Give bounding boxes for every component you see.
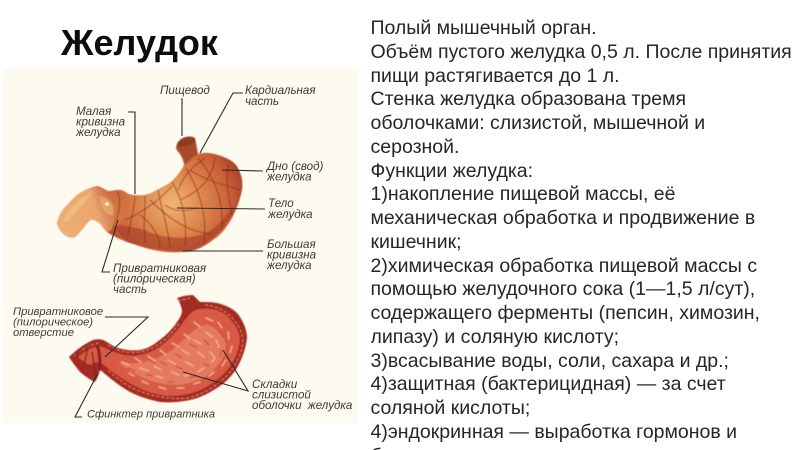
label: mucosal folds <box>252 378 353 412</box>
label: greater curvature: желудка <box>266 259 312 272</box>
label: body <box>267 197 313 221</box>
image background panel <box>3 68 358 423</box>
label: cardia <box>245 84 316 108</box>
text block: stomach description: 4)защитная (бактерицидная) — за счет <box>370 373 726 395</box>
text block: stomach description: оболочками: слизистой, мышечной и <box>370 112 705 134</box>
label: fundus: Дно (свод) <box>265 160 324 173</box>
label: pyloric opening <box>13 306 103 339</box>
label: mucosal folds: слизистой <box>252 388 311 402</box>
text block: stomach description: 1)накопление пищевой массы, её <box>370 183 675 205</box>
label: pyloric part: (пилорическая) <box>113 272 196 286</box>
illustration: outer stomach <box>57 136 242 252</box>
text block: stomach description: 4)эндокринная — выработка гормонов и <box>370 421 737 443</box>
label: sphincter: Сфинктер привратника <box>87 408 215 420</box>
text block: stomach description: содержащего ферменты (пепсин, химозин, <box>370 302 760 324</box>
label: body: желудка <box>267 208 313 221</box>
label: greater curvature: Большая <box>267 238 316 251</box>
label: lesser curvature: желудка <box>75 126 121 139</box>
text block: stomach description: пищи растягивается до 1 л. <box>370 64 620 86</box>
label: pyloric opening: Привратниковое <box>13 306 103 318</box>
text block: stomach description: механическая обработка и продвижение в <box>370 207 755 229</box>
text block: stomach description <box>370 17 792 450</box>
label: pyloric part: часть <box>113 283 147 296</box>
label: pyloric part <box>113 262 206 296</box>
label: esophagus: Пищевод <box>160 84 210 97</box>
label: cardia: Кардиальная <box>245 84 316 97</box>
labels <box>13 84 353 420</box>
label: mucosal folds: оболочки желудка <box>252 399 353 412</box>
text block: stomach description: Стенка желудка образована тремя <box>370 88 686 110</box>
text block: stomach description: Функции желудка: <box>370 160 533 182</box>
text block: stomach description: серозной. <box>370 136 459 158</box>
label: fundus: желудка <box>266 170 312 184</box>
text block: stomach description: липазу) и соляную кислоту; <box>370 326 619 348</box>
label: lesser curvature: Малая <box>76 105 111 118</box>
label: pyloric part: Привратниковая <box>113 262 206 275</box>
text block: stomach description: соляной кислоты; <box>370 397 530 419</box>
label: pyloric opening: (пилорическое) <box>13 316 93 328</box>
label: body: Тело <box>268 197 294 210</box>
label: greater curvature <box>266 238 317 272</box>
text block: stomach description: Объём пустого желудка 0,5 л. После принятия <box>370 41 792 63</box>
text block: stomach description: помощью желудочного сока (1—1,5 л/сут), <box>370 278 755 300</box>
text block: stomach description: 3)всасывание воды, соли, сахара и др.; <box>370 350 729 372</box>
label: pyloric opening: отверстие <box>13 327 74 339</box>
label: lesser curvature <box>75 105 126 139</box>
label: cardia: часть <box>245 95 279 108</box>
text block: stomach description: Полый мышечный орган. <box>370 17 597 39</box>
title: Желудок <box>61 22 218 62</box>
text block: stomach description: кишечник; <box>370 231 462 253</box>
label: greater curvature: кривизна <box>267 248 317 262</box>
label: fundus <box>265 160 324 184</box>
leader lines <box>75 93 265 417</box>
illustration: stomach section <box>69 295 247 402</box>
text block: stomach description: 2)химическая обработка пищевой массы с <box>370 254 757 276</box>
label: lesser curvature: кривизна <box>76 116 126 128</box>
label: mucosal folds: Складки <box>252 378 298 391</box>
